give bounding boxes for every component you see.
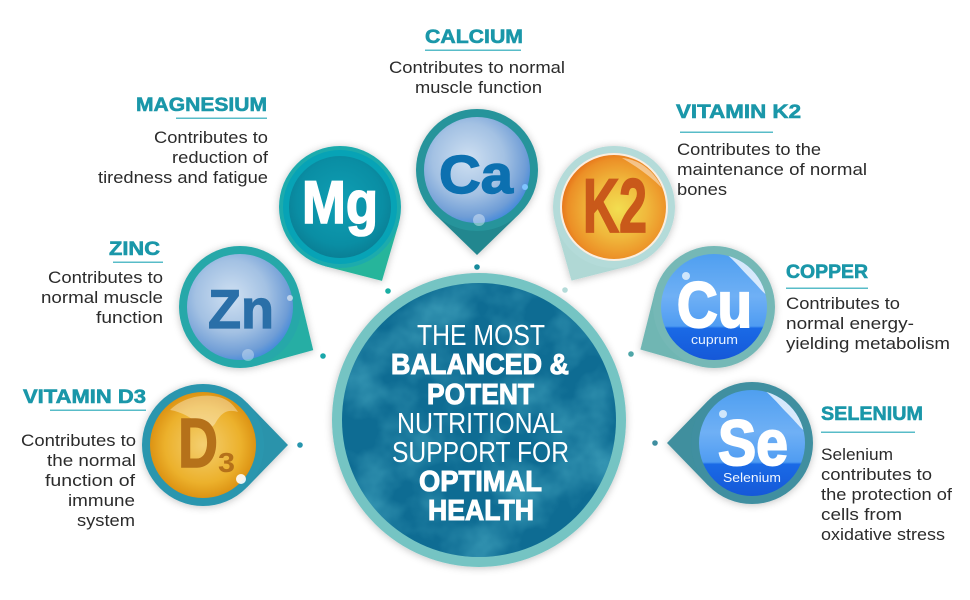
label: vitamin K2 — [676, 101, 867, 199]
label: vitamin D3 — [21, 386, 146, 530]
label: calcium — [389, 26, 565, 97]
pin: vitamin D3 — [142, 384, 303, 506]
pin: calcium: Ca — [439, 145, 514, 205]
label: calcium: muscle function — [415, 79, 542, 97]
pin: copper: cuprum — [691, 332, 738, 347]
central heading: BALANCED & — [391, 349, 569, 381]
label: vitamin K2: bones — [677, 181, 727, 199]
label: zinc: normal muscle — [41, 289, 163, 307]
central heading: HEALTH — [428, 495, 534, 527]
central heading: POTENT — [427, 379, 534, 411]
central heading: THE MOST — [417, 320, 545, 352]
central heading: OPTIMAL — [419, 466, 542, 498]
label: copper: yielding metabolism — [786, 335, 950, 353]
pin: vitamin D3: 3 — [218, 447, 235, 478]
pin: magnesium — [279, 146, 419, 302]
pin: selenium: Se — [718, 407, 788, 479]
pin: magnesium: Mg — [302, 169, 378, 236]
label: selenium: contributes to — [821, 466, 932, 484]
label: copper: normal energy- — [786, 315, 914, 333]
label: magnesium: reduction of — [172, 149, 268, 167]
label: selenium: SELENIUM — [821, 403, 923, 425]
pin: vitamin K2 — [535, 146, 675, 302]
label: vitamin D3: function of — [45, 472, 135, 490]
label: selenium: cells from — [821, 506, 902, 524]
label: calcium: Contributes to normal — [389, 59, 565, 77]
label: calcium: CALCIUM — [425, 26, 523, 48]
pin: selenium — [652, 382, 813, 504]
central heading — [391, 320, 569, 527]
label: vitamin D3: the normal — [47, 452, 136, 470]
pin: copper: Cu — [677, 269, 752, 341]
label: zinc: function — [96, 309, 163, 327]
label: zinc — [41, 238, 163, 327]
label: magnesium: tiredness and fatigue — [98, 169, 268, 187]
label: vitamin D3: system — [77, 512, 135, 530]
label: vitamin D3: VITAMIN D3 — [23, 386, 146, 408]
label: vitamin K2: maintenance of normal — [677, 161, 867, 179]
label: magnesium: Contributes to — [154, 129, 268, 147]
central heading: NUTRITIONAL — [397, 408, 563, 440]
label: copper: COPPER — [786, 261, 868, 283]
label: selenium: oxidative stress — [821, 526, 945, 544]
label: selenium: the protection of — [821, 486, 952, 504]
label: copper: Contributes to — [786, 295, 900, 313]
pin: vitamin D3: D — [178, 404, 218, 482]
pin: zinc — [179, 246, 335, 387]
pin: copper — [628, 243, 779, 373]
label: magnesium — [98, 94, 268, 187]
label: zinc: ZINC — [109, 238, 160, 260]
label: magnesium: MAGNESIUM — [136, 94, 267, 116]
label: selenium: Selenium — [821, 446, 893, 464]
pin: selenium: Selenium — [723, 470, 781, 485]
pin: vitamin K2: K2 — [583, 164, 647, 249]
label: vitamin D3: Contributes to — [21, 432, 136, 450]
label: selenium — [821, 403, 952, 544]
label: vitamin D3: immune — [68, 492, 135, 510]
pin: zinc: Zn — [208, 278, 274, 340]
label: vitamin K2: VITAMIN K2 — [676, 101, 801, 123]
pin: calcium — [416, 109, 538, 270]
label: copper — [786, 261, 950, 353]
central heading: SUPPORT FOR — [392, 437, 569, 469]
label: zinc: Contributes to — [48, 269, 163, 287]
central badge — [332, 273, 626, 567]
label: vitamin K2: Contributes to the — [677, 141, 821, 159]
